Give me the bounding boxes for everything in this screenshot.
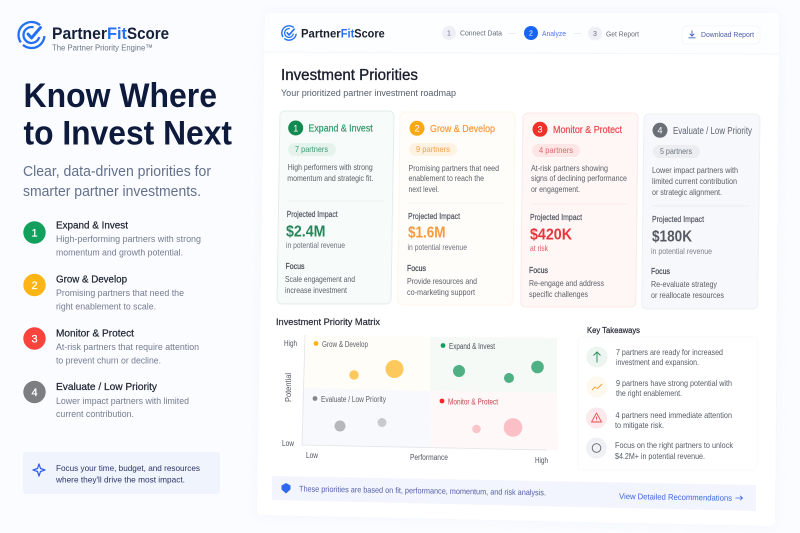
legend item 1: High-performing partners with strong	[56, 234, 201, 244]
panel: expand and invest: 1	[293, 123, 298, 133]
axis labels: Performance	[410, 453, 448, 462]
legend item 3	[23, 327, 199, 366]
axis labels: High	[284, 339, 297, 348]
panel: evaluate low priority: limited current contribution	[652, 176, 737, 186]
panel: evaluate low priority	[642, 114, 760, 309]
quadrant: monitor and protect	[430, 391, 558, 450]
legend item 4: Lower impact partners with limited	[56, 396, 189, 406]
legend item 3: to prevent churn or decline.	[56, 356, 161, 366]
panel: evaluate low priority: Evaluate / Low Priority	[673, 126, 752, 137]
header wordmark: Score	[354, 26, 385, 40]
subheading: smarter partner investments.	[23, 184, 201, 200]
quadrant: expand and invest: Expand & Invest	[449, 342, 496, 351]
panel: evaluate low priority: $180K	[652, 228, 693, 246]
legend item 3: Monitor & Protect	[56, 328, 134, 340]
download button: Download Report	[701, 30, 754, 39]
panel: evaluate low priority: Re-evaluate strategy	[651, 279, 718, 289]
panel: expand and invest: Projected Impact	[287, 209, 338, 219]
legend item 1: momentum and growth potential.	[56, 248, 183, 258]
panel: monitor and protect	[521, 113, 638, 307]
footer link: View Detailed Recommendations	[619, 492, 732, 503]
matrix heading: Investment Priority Matrix	[276, 317, 380, 327]
panel: evaluate low priority: or reallocate resources	[651, 290, 724, 300]
legend item 2: right enablement to scale.	[56, 302, 156, 312]
legend item 2: 2	[31, 280, 38, 292]
callout	[23, 452, 220, 494]
panel: monitor and protect: at risk	[530, 243, 549, 253]
takeaway 2	[586, 376, 732, 398]
legend item 4: current contribution.	[56, 409, 134, 419]
subheading	[23, 164, 211, 200]
panel: expand and invest: increase investment	[285, 285, 348, 295]
axis labels: High	[535, 456, 548, 465]
takeaway 3	[586, 408, 732, 430]
wordmark: Score	[127, 25, 169, 43]
panel: expand and invest: Scale engagement and	[285, 274, 355, 284]
panel: evaluate low priority: in potential revenue	[651, 246, 712, 256]
panel: monitor and protect: $420K	[530, 226, 573, 244]
download button	[682, 26, 760, 44]
panel: expand and invest: Expand & Invest	[308, 124, 373, 134]
header bar	[281, 25, 760, 44]
panel: monitor and protect: At-risk partners showing	[531, 163, 608, 173]
panel: grow and develop: Provide resources and	[407, 276, 477, 286]
panel: expand and invest: High performers with strong	[288, 162, 373, 172]
panel: expand and invest	[277, 111, 394, 304]
wordmark	[52, 25, 169, 43]
panel: monitor and protect: Monitor & Protect	[553, 125, 622, 136]
headline: Know Where	[24, 77, 217, 115]
callout: Focus your time, budget, and resources	[56, 463, 200, 473]
headline	[24, 77, 232, 152]
section title: Investment Priorities	[281, 67, 418, 84]
step 3: 3	[593, 31, 597, 38]
header wordmark	[301, 26, 385, 40]
legend item 2: Grow & Develop	[56, 274, 127, 286]
step 2: 2	[529, 30, 533, 38]
panel: evaluate low priority: 4	[657, 126, 663, 136]
step 2	[524, 26, 566, 40]
panel: monitor and protect: Re-engage and address	[529, 278, 604, 288]
legend item 1	[23, 220, 201, 258]
callout: where they'll drive the most impact.	[55, 474, 185, 484]
panel: evaluate low priority: Projected Impact	[652, 214, 705, 224]
legend item 3: 3	[31, 334, 38, 346]
wordmark: Fit	[107, 25, 127, 43]
takeaway 1: 7 partners are ready for increased	[616, 348, 723, 357]
panel: evaluate low priority: Focus	[651, 266, 670, 276]
quadrant: evaluate low priority	[302, 388, 431, 448]
axis labels: Low	[282, 439, 294, 448]
panel: grow and develop: 9 partners	[416, 144, 450, 154]
panel: grow and develop: next level.	[408, 184, 439, 194]
step 2: Analyze	[542, 29, 566, 38]
takeaway 3: 4 partners need immediate attention	[616, 411, 732, 420]
panel: monitor and protect: specific challenges	[529, 289, 588, 299]
panel: grow and develop: enablement to reach the	[408, 173, 484, 183]
brand logo	[17, 21, 169, 52]
icon: header logo	[281, 25, 297, 41]
legend item 2	[23, 274, 184, 312]
left column	[17, 21, 232, 494]
subheading: Clear, data-driven priorities for	[23, 164, 211, 180]
panel: expand and invest: in potential revenue	[286, 240, 345, 250]
panel: grow and develop: 2	[414, 124, 420, 134]
icon: badge	[282, 483, 290, 494]
panel: monitor and protect: signs of declining performance	[531, 173, 627, 183]
quadrant: evaluate low priority: Evaluate / Low Priority	[321, 395, 386, 404]
panel: expand and invest: Focus	[286, 261, 304, 271]
panel: grow and develop	[398, 112, 515, 305]
panel: evaluate low priority: 5 partners	[660, 146, 692, 156]
quadrant: monitor and protect: Monitor & Protect	[448, 398, 499, 406]
arrow	[736, 496, 742, 500]
takeaway 4: Focus on the right partners to unlock	[615, 441, 734, 450]
step 1: 1	[447, 30, 451, 38]
panel: monitor and protect: Projected Impact	[530, 212, 583, 222]
headline: to Invest Next	[24, 114, 232, 152]
axis labels: Potential	[284, 373, 293, 402]
panel: grow and develop: $1.6M	[408, 224, 446, 242]
tagline: The Partner Priority Engine™	[52, 42, 153, 52]
legend item 4: Evaluate / Low Priority	[56, 381, 158, 393]
panel: monitor and protect: or engagement.	[531, 184, 580, 194]
legend item 4	[23, 381, 189, 419]
takeaway 4	[586, 438, 734, 461]
footer note: These priorities are based on fit, performance, momentum, and risk analysis.	[299, 485, 546, 497]
quadrant: grow and develop: Grow & Develop	[322, 340, 369, 349]
panel: monitor and protect: 3	[537, 125, 543, 135]
takeaway 2: the right enablement.	[616, 389, 682, 398]
icon: target check	[17, 21, 46, 49]
panel: evaluate low priority: or strategic alignment.	[652, 187, 722, 197]
footer bar	[272, 476, 756, 511]
header wordmark: Fit	[341, 26, 354, 40]
step 3: Get Report	[606, 29, 639, 38]
takeaway 3: to mitigate risk.	[615, 421, 664, 430]
panel: monitor and protect: 4 partners	[539, 145, 573, 155]
step 3	[588, 26, 639, 40]
panel: expand and invest: momentum and strategic fit.	[287, 173, 373, 183]
legend item 1: 1	[31, 228, 38, 240]
takeaway 2: 9 partners have strong potential with	[616, 379, 732, 388]
panel: grow and develop: Grow & Develop	[430, 124, 495, 135]
quadrant: grow and develop	[303, 335, 430, 391]
panel: grow and develop: Projected Impact	[408, 211, 461, 221]
dashboard panel	[257, 13, 779, 526]
section subtitle: Your prioritized partner investment roadmap	[281, 88, 456, 98]
legend item 4: 4	[31, 387, 38, 399]
panel: evaluate low priority: Lower impact partners with	[652, 165, 738, 175]
chart: priority matrix	[282, 335, 558, 465]
takeaway 4: $4.2M+ in potential revenue.	[615, 452, 705, 461]
wordmark: Partner	[52, 25, 108, 43]
header wordmark: Partner	[301, 26, 341, 40]
panel: expand and invest: $2.4M	[286, 224, 326, 240]
panel: expand and invest: 7 partners	[295, 144, 328, 154]
takeaway 1	[586, 346, 723, 368]
panel: grow and develop: Promising partners that need	[408, 163, 499, 173]
panel: grow and develop: co-marketing support	[407, 287, 476, 297]
panel: grow and develop: in potential revenue	[408, 242, 467, 252]
quadrant: expand and invest	[430, 337, 557, 393]
axis labels	[282, 339, 548, 465]
panel: grow and develop: Focus	[407, 263, 426, 273]
legend item 1: Expand & Invest	[56, 220, 128, 232]
step 1	[442, 26, 503, 40]
panel: monitor and protect: Focus	[529, 265, 548, 275]
axis labels: Low	[306, 451, 318, 460]
takeaway 1: investment and expansion.	[616, 358, 699, 367]
legend item 3: At-risk partners that require attention	[56, 342, 199, 352]
step 1: Connect Data	[460, 28, 503, 38]
panel: key takeaways	[578, 325, 757, 470]
panel: key takeaways: Key Takeaways	[587, 325, 640, 335]
legend item 2: Promising partners that need the	[56, 288, 184, 298]
